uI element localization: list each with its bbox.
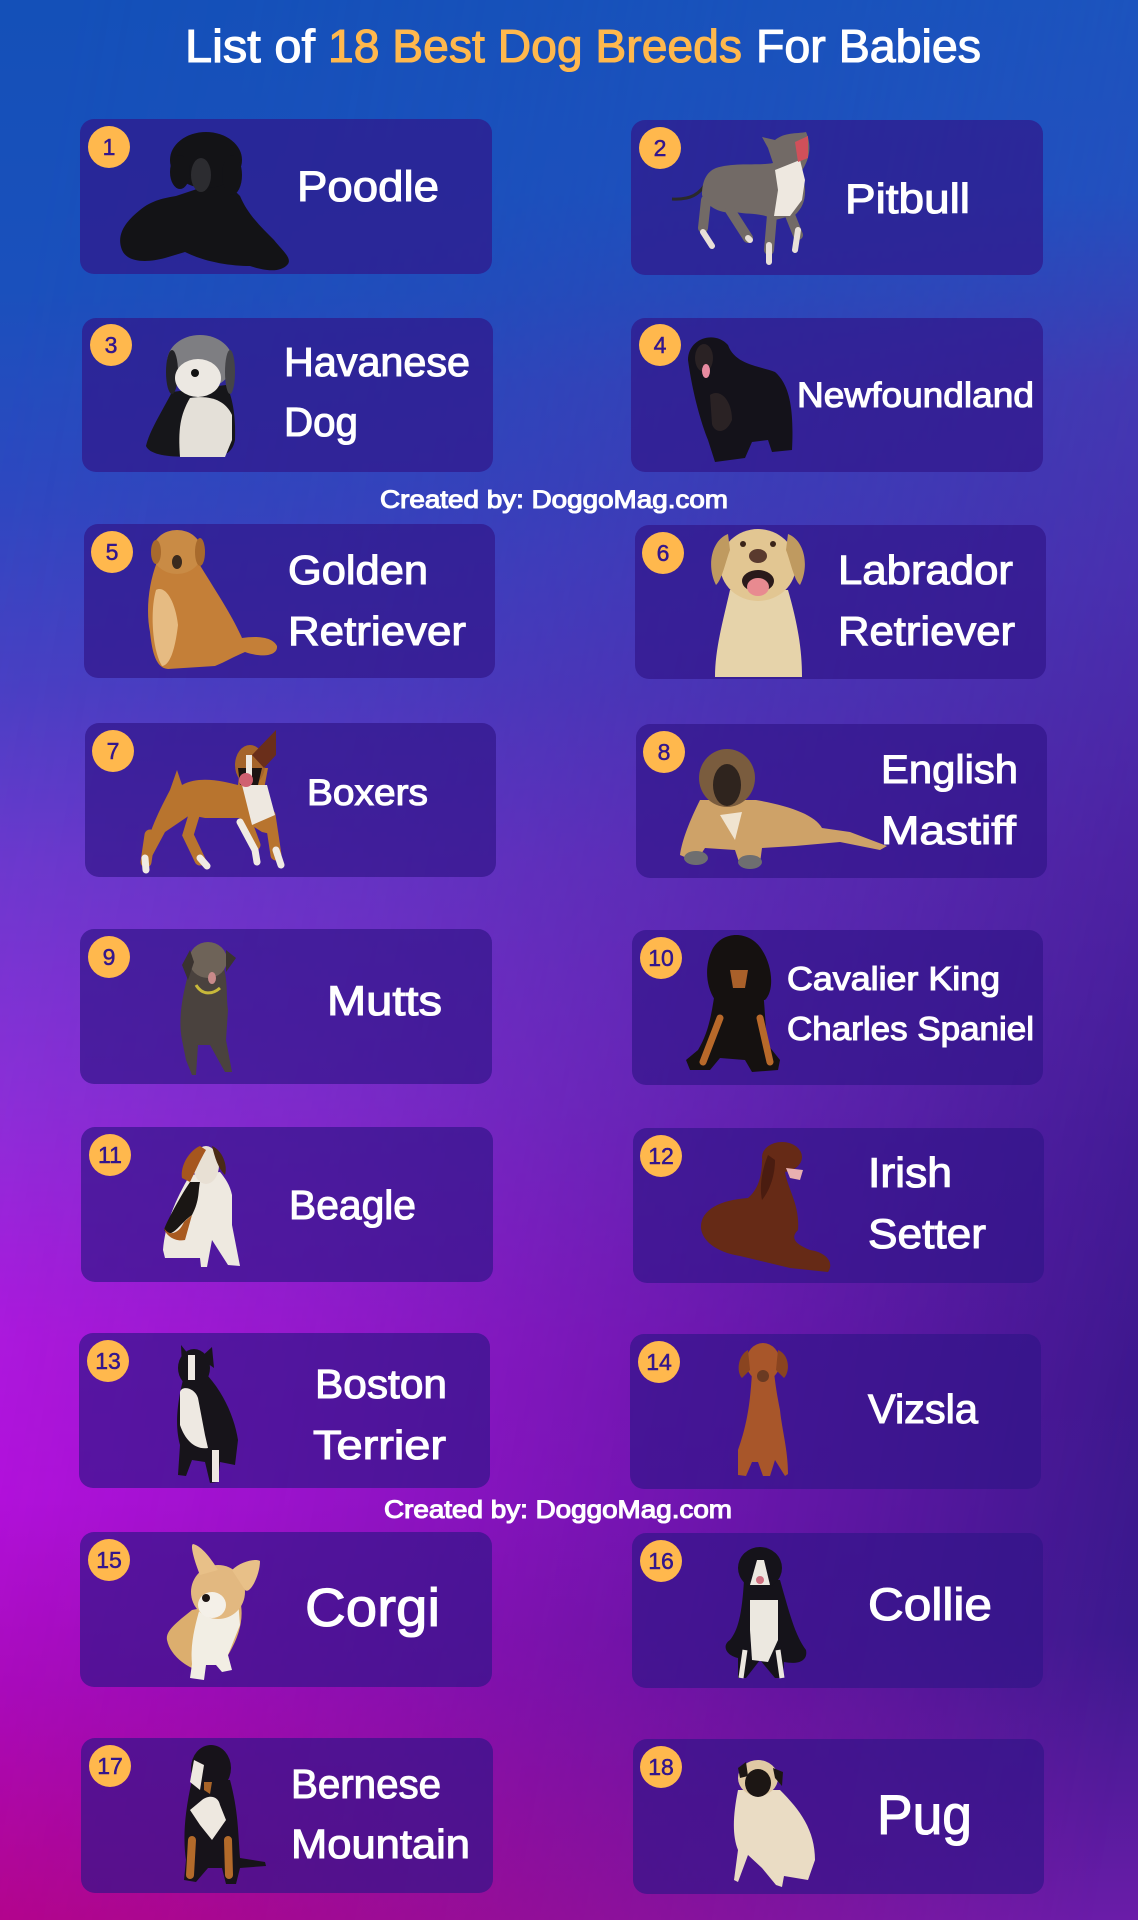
- icon: newfoundland: [688, 337, 792, 462]
- panel: [80, 119, 492, 274]
- icon: havanese: [146, 335, 235, 457]
- title: [185, 20, 981, 72]
- icon: boxer: [143, 730, 281, 870]
- panel: [633, 1128, 1044, 1283]
- icon: corgi: [167, 1544, 260, 1680]
- label: Setter: [868, 1210, 986, 1257]
- label: Irish: [868, 1149, 952, 1196]
- number badge: 2: [654, 135, 666, 161]
- label: Retriever: [288, 608, 466, 654]
- number badge: [640, 1746, 682, 1788]
- panel: [636, 724, 1047, 878]
- icon: labrador: [711, 529, 805, 677]
- card 14: Vizsla: [630, 1334, 1041, 1489]
- icon: vizsla: [738, 1343, 788, 1476]
- number badge: [90, 324, 132, 366]
- icon: poodle: [120, 132, 289, 270]
- card 13: Boston Terrier: [79, 1333, 490, 1488]
- icon: irish setter: [701, 1142, 830, 1272]
- panel: [632, 930, 1043, 1085]
- label: [284, 339, 470, 445]
- number badge: 1: [103, 134, 115, 160]
- number badge: [640, 1135, 682, 1177]
- card 16: Collie: [632, 1533, 1043, 1688]
- title: For Babies: [756, 20, 981, 72]
- label: [787, 960, 1034, 1047]
- number badge: 8: [658, 739, 670, 765]
- label: Terrier: [313, 1422, 446, 1468]
- panel: [80, 929, 492, 1084]
- panel: [630, 1334, 1041, 1489]
- icon: mastiff: [680, 749, 887, 869]
- number badge: 5: [106, 539, 118, 565]
- panel: [84, 524, 495, 678]
- panel: [85, 723, 496, 877]
- card 7: Boxers: [85, 723, 496, 877]
- label: [291, 1761, 470, 1867]
- label: Cavalier King: [787, 960, 1000, 997]
- icon: boston terrier: [177, 1345, 238, 1483]
- panel: [80, 1532, 492, 1687]
- label: Havanese: [284, 339, 470, 385]
- label: Mastiff: [881, 809, 1017, 853]
- label: Vizsla: [868, 1386, 978, 1432]
- card 5: Golden Retriever: [84, 524, 495, 678]
- label: Mountain: [291, 1821, 470, 1867]
- label: Corgi: [305, 1578, 440, 1638]
- card 10: Cavalier King Charles Spaniel: [632, 930, 1043, 1085]
- number badge: 13: [95, 1348, 121, 1374]
- card 15: Corgi: [80, 1532, 492, 1687]
- panel: [82, 318, 493, 472]
- panel: [632, 1533, 1043, 1688]
- label: Dog: [284, 399, 358, 445]
- label: [313, 1361, 447, 1468]
- number badge: [639, 324, 681, 366]
- number badge: 10: [648, 945, 674, 971]
- number badge: 6: [657, 540, 669, 566]
- number badge: [88, 936, 130, 978]
- icon: bernese: [184, 1745, 266, 1884]
- label: Retriever: [838, 608, 1015, 654]
- label: Mutts: [327, 977, 442, 1024]
- number badge: 18: [648, 1754, 674, 1780]
- label: Bernese: [291, 1761, 441, 1807]
- credit line 1: Created by: DoggoMag.com: [380, 486, 728, 514]
- icon: collie: [726, 1547, 806, 1678]
- label: Pug: [877, 1783, 972, 1846]
- number badge: [89, 1134, 131, 1176]
- card 3: Havanese Dog: [82, 318, 493, 472]
- number badge: 12: [648, 1143, 674, 1169]
- label: Boxers: [307, 772, 428, 813]
- label: Labrador: [838, 547, 1013, 593]
- title: List of: [185, 20, 315, 72]
- number badge: 16: [648, 1548, 674, 1574]
- icon: pitbull: [672, 132, 809, 262]
- number badge: [643, 731, 685, 773]
- credit line 2: Created by: DoggoMag.com: [384, 1496, 732, 1524]
- number badge: 3: [105, 332, 117, 358]
- number badge: [642, 532, 684, 574]
- card 2: Pitbull: [631, 120, 1043, 275]
- label: Poodle: [297, 163, 439, 211]
- number badge: [88, 1539, 130, 1581]
- card 6: Labrador Retriever: [635, 525, 1046, 679]
- number badge: [89, 1745, 131, 1787]
- number badge: 17: [97, 1753, 123, 1779]
- number badge: 15: [96, 1547, 122, 1573]
- panel: [635, 525, 1046, 679]
- icon: pug: [734, 1760, 815, 1887]
- label: Pitbull: [845, 175, 970, 222]
- number badge: 14: [646, 1349, 672, 1375]
- label: Beagle: [289, 1182, 416, 1228]
- card 8: English Mastiff: [636, 724, 1047, 878]
- number badge: 11: [98, 1142, 122, 1168]
- number badge: [640, 937, 682, 979]
- number badge: [92, 730, 134, 772]
- number badge: 9: [103, 944, 115, 970]
- label: [838, 547, 1015, 654]
- number badge: [88, 126, 130, 168]
- label: [881, 748, 1018, 853]
- number badge: 4: [654, 332, 667, 358]
- label: Newfoundland: [797, 376, 1034, 415]
- panel: [631, 120, 1043, 275]
- label: Charles Spaniel: [787, 1010, 1034, 1047]
- number badge: [87, 1340, 129, 1382]
- panel: [81, 1738, 493, 1893]
- card 1: Poodle: [80, 119, 492, 274]
- label: Boston: [315, 1361, 447, 1407]
- label: Collie: [868, 1579, 992, 1630]
- card 4: Newfoundland: [631, 318, 1043, 472]
- number badge: [638, 1341, 680, 1383]
- icon: beagle: [163, 1146, 240, 1267]
- icon: cavalier: [686, 935, 780, 1072]
- icon: golden retriever: [148, 530, 277, 669]
- label: [868, 1149, 986, 1257]
- number badge: [91, 531, 133, 573]
- panel: [631, 318, 1043, 472]
- panel: [633, 1739, 1044, 1894]
- number badge: [639, 127, 681, 169]
- card 11: Beagle: [81, 1127, 493, 1282]
- panel: [79, 1333, 490, 1488]
- panel: [81, 1127, 493, 1282]
- card 17: Bernese Mountain: [81, 1738, 493, 1893]
- number badge: [640, 1540, 682, 1582]
- number badge: 7: [107, 738, 119, 764]
- label: English: [881, 748, 1018, 792]
- label: [288, 547, 466, 654]
- label: Golden: [288, 547, 428, 593]
- card 12: Irish Setter: [633, 1128, 1044, 1283]
- card 9: Mutts: [80, 929, 492, 1084]
- card 18: Pug: [633, 1739, 1044, 1894]
- icon: mutt: [180, 942, 236, 1075]
- title: 18 Best Dog Breeds: [328, 20, 742, 72]
